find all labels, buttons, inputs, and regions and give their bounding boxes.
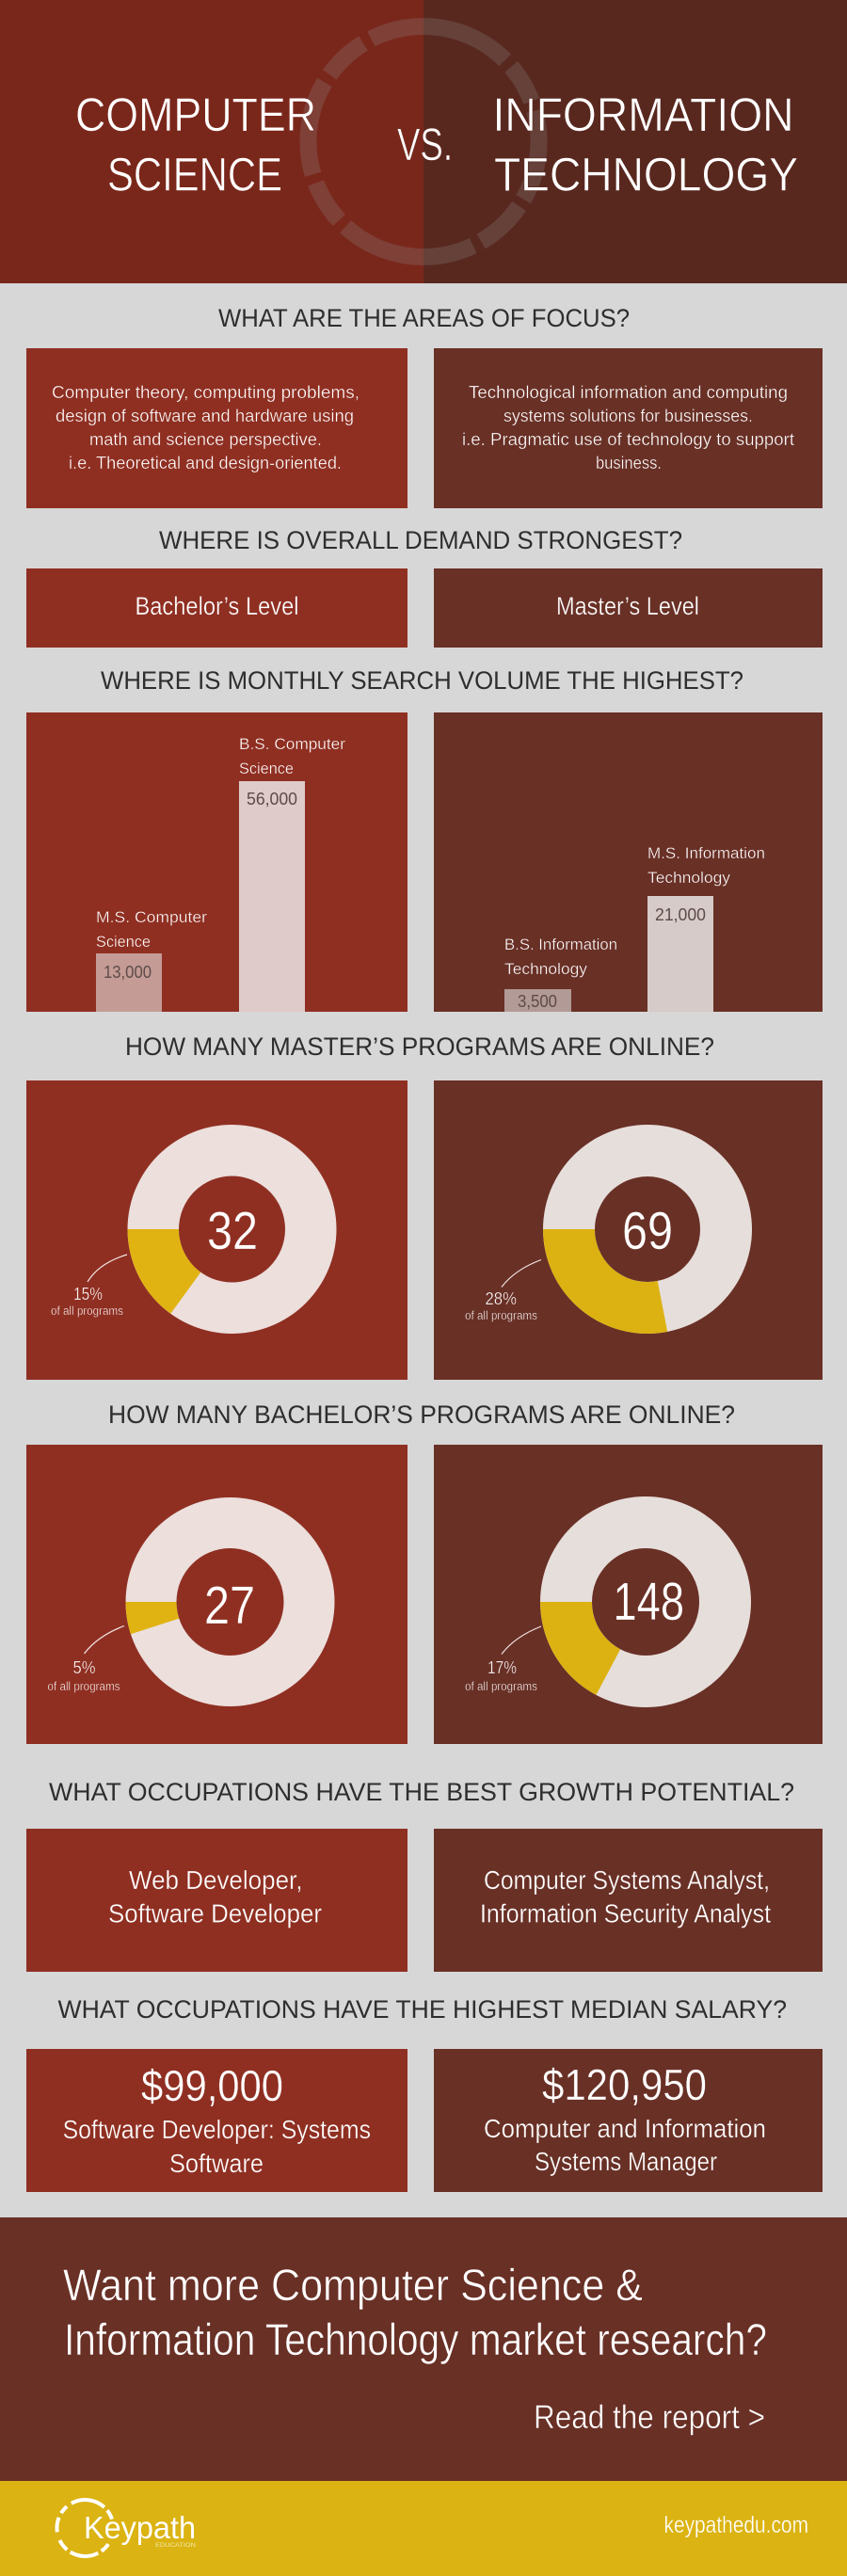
- label: M.S. Computer Science: [96, 908, 207, 951]
- logo: Keypath Education: EDUCATION: [155, 2542, 196, 2549]
- panel: computer science salary: Software Developer: Systems: [63, 2115, 371, 2144]
- bar: B.S. Information Technology 3,500: [504, 989, 571, 1012]
- footer bar: [0, 2481, 847, 2576]
- donut chart: 32 programs, 15%: [128, 1125, 337, 1334]
- bar: M.S. Information Technology 21,000: 21,000: [655, 905, 706, 924]
- panel: computer science growth occupations: Web Developer,: [129, 1865, 303, 1895]
- panel: computer science salary: $99,000: [141, 2061, 283, 2110]
- panel: information technology search volume bar chart: [434, 712, 823, 1012]
- title: information technology: [493, 88, 798, 201]
- panel: computer science growth occupations: [26, 1829, 408, 1972]
- label: M.S. Information Technology: [647, 844, 765, 887]
- label: B.S. Information Technology: B.S. Information: [504, 936, 617, 953]
- callout: 5% of all programs: [47, 1626, 124, 1693]
- callout: 28% of all programs: 28%: [486, 1289, 517, 1308]
- panel: computer science salary: [26, 2049, 408, 2192]
- heading: overall demand: WHERE IS OVERALL DEMAND STRONGEST?: [159, 526, 682, 554]
- panel: computer science growth occupations: Software Developer: [108, 1899, 322, 1928]
- callout: 28% of all programs: of all programs: [465, 1308, 537, 1322]
- panel: information technology focus: i.e. Pragmatic use of technology to support: [462, 429, 794, 449]
- title: computer science: [75, 88, 316, 201]
- bar: M.S. Computer Science 13,000: [96, 953, 162, 1012]
- label: M.S. Computer Science: Science: [96, 933, 151, 951]
- label: B.S. Computer Science: Science: [239, 760, 294, 777]
- donut chart: 27 programs, 5%: 27: [204, 1576, 255, 1636]
- panel: information technology focus: systems solutions for businesses.: [503, 406, 753, 425]
- panel: computer science salary: Software: [169, 2149, 264, 2178]
- callout: 15% of all programs: 15%: [73, 1285, 103, 1304]
- label: B.S. Information Technology: [504, 936, 617, 978]
- panel: information technology salary: Systems Manager: [535, 2147, 717, 2176]
- title: information technology: INFORMATION: [493, 88, 794, 141]
- panel: computer science focus: math and science perspective.: [89, 429, 322, 449]
- callout: 28% of all programs: [465, 1259, 541, 1322]
- read the report link: Read the report >: [534, 2399, 765, 2436]
- callout: 17% of all programs: of all programs: [465, 1679, 537, 1693]
- panel: information technology focus: Technological information and computing: [469, 382, 788, 402]
- label: B.S. Computer Science: [239, 735, 345, 777]
- panel: computer science bachelor's donut: [26, 1445, 408, 1744]
- panel: computer science search volume bar chart: [26, 712, 408, 1012]
- label: B.S. Computer Science: B.S. Computer: [239, 735, 345, 753]
- decorative dashed ring: [268, 0, 579, 296]
- panel: information technology growth occupations: [434, 1829, 823, 1972]
- call to action panel: [0, 2217, 847, 2481]
- heading: bachelor's programs online: HOW MANY BACHELOR’S PROGRAMS ARE ONLINE?: [108, 1400, 735, 1429]
- heading: median salary: WHAT OCCUPATIONS HAVE THE HIGHEST MEDIAN SALARY?: [58, 1995, 787, 2024]
- panel: bachelor's level: [26, 568, 408, 648]
- heading: master's programs online: HOW MANY MASTER’S PROGRAMS ARE ONLINE?: [125, 1032, 714, 1061]
- panel: information technology growth occupations: Computer Systems Analyst,: [484, 1865, 770, 1895]
- panel: information technology salary: [434, 2049, 823, 2192]
- panel: computer science master's donut: [26, 1080, 408, 1380]
- callout: 15% of all programs: of all programs: [51, 1304, 123, 1318]
- logo: Keypath Education: [47, 2489, 196, 2567]
- donut chart: 69 programs, 28%: 69: [622, 1201, 673, 1261]
- callout: 17% of all programs: [465, 1626, 541, 1693]
- panel: master's level: [434, 568, 823, 648]
- header left background: [0, 0, 424, 283]
- panel: information technology bachelor's donut: [434, 1445, 823, 1744]
- panel: bachelor's level: Bachelor’s Level: [136, 592, 299, 620]
- bar: B.S. Computer Science 56,000: 56,000: [247, 790, 297, 808]
- donut chart: 148 programs, 17%: 148: [614, 1572, 684, 1632]
- panel: information technology salary: Computer and Information: [484, 2114, 766, 2143]
- donut chart: 148 programs, 17%: [540, 1496, 751, 1707]
- header right background: [424, 0, 847, 283]
- donut chart: 27 programs, 5%: [125, 1497, 335, 1706]
- bar: B.S. Information Technology 3,500: 3,500: [518, 992, 557, 1011]
- bar: B.S. Computer Science 56,000: [239, 781, 305, 1012]
- label: M.S. Information Technology: Technology: [647, 869, 731, 887]
- title: vs: VS.: [397, 120, 453, 170]
- callout: 15% of all programs: [51, 1255, 127, 1318]
- panel: computer science focus: [26, 348, 408, 508]
- donut chart: 32 programs, 15%: 32: [207, 1201, 258, 1261]
- panel: information technology focus: business.: [596, 453, 662, 472]
- call to action headline: Want more Computer Science &: [63, 2260, 643, 2310]
- donut chart: 69 programs, 28%: [543, 1125, 752, 1334]
- panel: information technology focus: [434, 348, 823, 508]
- panel: computer science focus: design of software and hardware using: [56, 406, 354, 425]
- title: information technology: TECHNOLOGY: [494, 149, 798, 201]
- heading: areas of focus: WHAT ARE THE AREAS OF FOCUS?: [218, 304, 630, 332]
- heading: search volume: WHERE IS MONTHLY SEARCH VOLUME THE HIGHEST?: [101, 666, 743, 695]
- panel: master's level: Master’s Level: [556, 592, 699, 620]
- callout: 17% of all programs: 17%: [487, 1658, 517, 1677]
- panel: computer science focus: Computer theory, computing problems,: [52, 382, 360, 402]
- label: M.S. Computer Science: M.S. Computer: [96, 908, 207, 926]
- logo: Keypath Education: Keypath: [84, 2510, 196, 2545]
- label: M.S. Information Technology: M.S. Information: [647, 844, 765, 862]
- heading: growth potential: WHAT OCCUPATIONS HAVE THE BEST GROWTH POTENTIAL?: [49, 1778, 794, 1806]
- panel: information technology master's donut: [434, 1080, 823, 1380]
- panel: information technology salary: $120,950: [542, 2060, 707, 2109]
- call to action headline: [63, 2260, 767, 2364]
- bar: M.S. Information Technology 21,000: [647, 896, 713, 1012]
- header banner: [0, 0, 847, 296]
- title: computer science: COMPUTER: [75, 88, 316, 141]
- panel: computer science focus: i.e. Theoretical and design-oriented.: [69, 453, 342, 472]
- label: B.S. Information Technology: Technology: [504, 960, 588, 978]
- bar: M.S. Computer Science 13,000: 13,000: [104, 963, 152, 982]
- callout: 5% of all programs: of all programs: [47, 1679, 120, 1693]
- website address: keypathedu.com: [664, 2512, 808, 2538]
- title: computer science: SCIENCE: [107, 149, 282, 201]
- callout: 5% of all programs: 5%: [73, 1658, 96, 1677]
- panel: information technology growth occupations: Information Security Analyst: [480, 1899, 771, 1928]
